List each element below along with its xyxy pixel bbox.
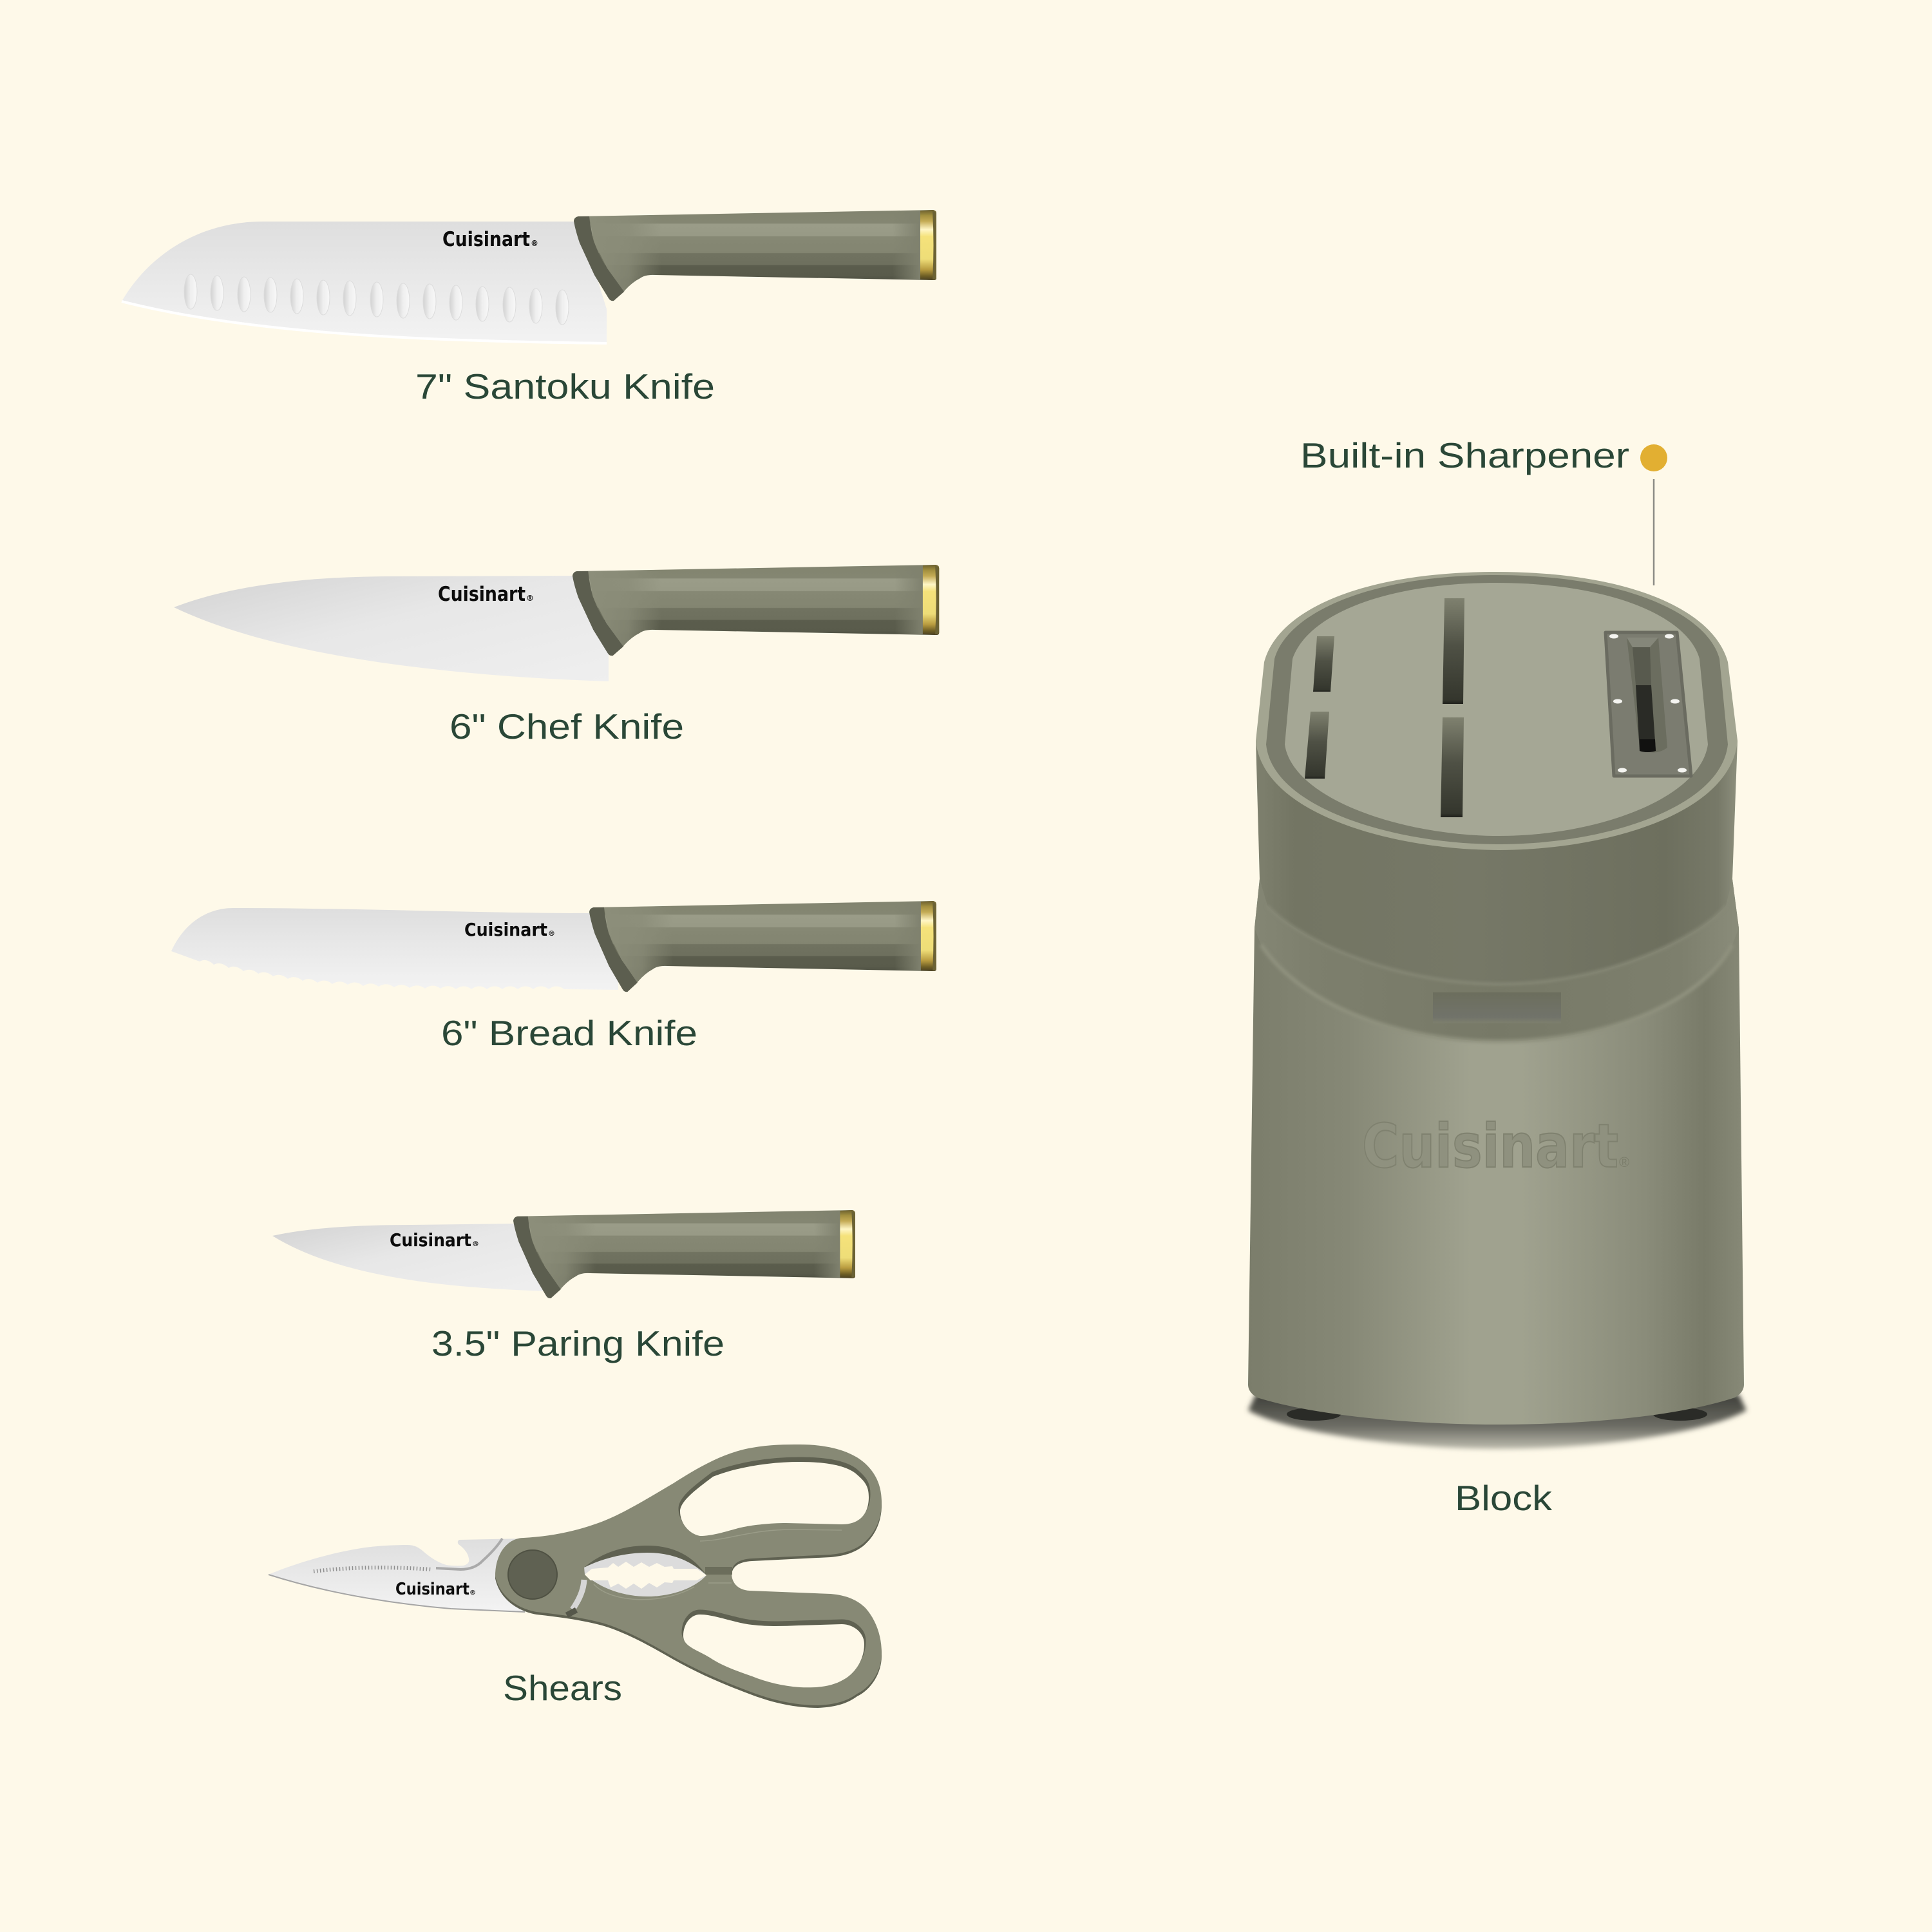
paring knife: ®: [472, 1240, 479, 1248]
block top rim: [1256, 572, 1738, 850]
rim groove: [1266, 575, 1728, 844]
shears blade: Cuisinart: [395, 1580, 469, 1599]
chef knife: ®: [526, 594, 534, 603]
knife slots: [1305, 598, 1464, 817]
santoku knife: [122, 210, 936, 344]
shears handle: [495, 1444, 882, 1708]
label: paring: 3.5" Paring Knife: [431, 1323, 724, 1363]
sharpener plate: [1605, 632, 1691, 776]
bread knife: Cuisinart: [464, 919, 547, 940]
embossed block logo: ®: [1619, 1154, 1629, 1170]
paring knife: Cuisinart: [390, 1229, 471, 1251]
top plate: [1285, 583, 1708, 836]
paring knife: [272, 1210, 855, 1298]
label: shears: Shears: [503, 1668, 622, 1708]
block shadow: [1248, 1394, 1747, 1449]
label: santoku: 7" Santoku Knife: [415, 366, 715, 406]
label: chef: 6" Chef Knife: [450, 706, 684, 746]
shears blade: [269, 1539, 525, 1612]
label: block: Block: [1455, 1478, 1553, 1518]
block base: [1248, 879, 1744, 1425]
label: bread: 6" Bread Knife: [441, 1013, 697, 1053]
knife block: [1248, 572, 1747, 1449]
chef knife: Cuisinart: [438, 583, 526, 606]
callout dot: [1640, 444, 1667, 471]
callout: built-in sharpener: [1300, 435, 1667, 585]
base shoulder ledge: [1255, 879, 1739, 1041]
block feet: [1287, 1408, 1707, 1421]
bread knife: [171, 901, 936, 992]
bread knife: ®: [548, 929, 555, 938]
shears: [269, 1444, 882, 1708]
embossed block logo: Cuisinart: [1362, 1112, 1618, 1182]
shears pivot: [508, 1550, 557, 1599]
base notch: [1433, 992, 1561, 1023]
block upper tube: [1256, 741, 1738, 984]
chef knife: [174, 565, 939, 681]
callout text: Built-in Sharpener: [1300, 435, 1629, 475]
shears blade: ®: [469, 1589, 476, 1596]
callout leader line: [1653, 479, 1654, 585]
santoku knife: Cuisinart: [442, 228, 530, 251]
shears divider: [567, 1580, 584, 1615]
santoku knife: ®: [531, 239, 538, 248]
